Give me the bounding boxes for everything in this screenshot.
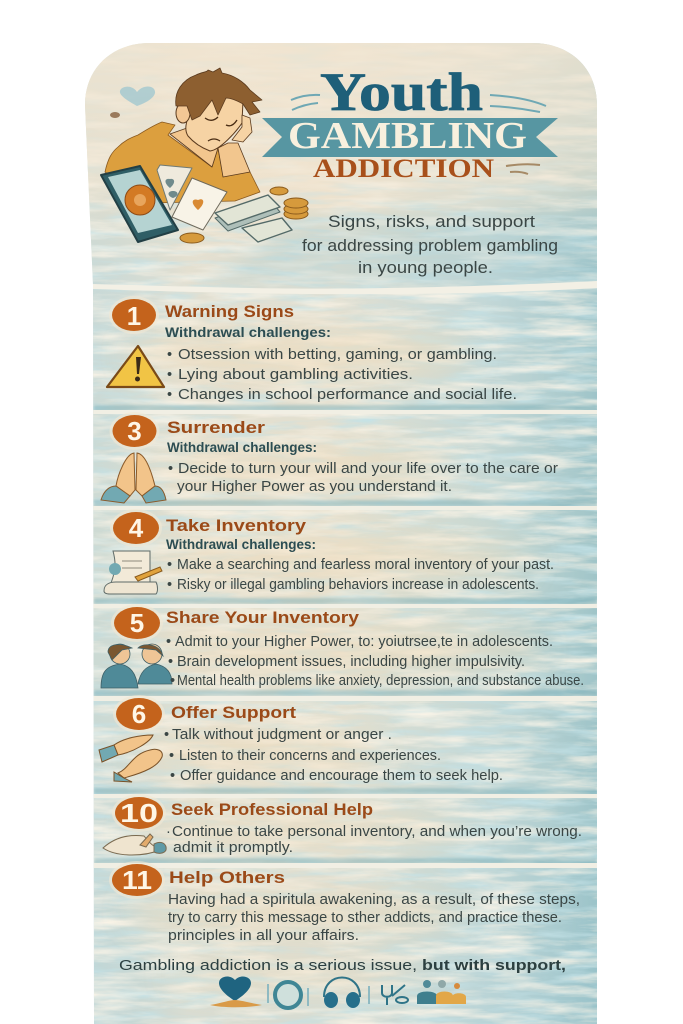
bullet list: • — [170, 768, 175, 784]
bullet list: Changes in school performance and social life. — [178, 387, 517, 403]
coin on table — [180, 233, 204, 243]
body text: principles in all your affairs. — [168, 928, 359, 944]
bullet list: Make a searching and fearless moral inventory of your past. — [177, 557, 554, 573]
body text: try to carry this message to sther addicts, and practice these. — [168, 910, 562, 926]
badge 4: 4 — [129, 513, 144, 543]
icon: helping hands — [99, 735, 162, 782]
badge 1 — [109, 296, 159, 334]
body text — [166, 824, 582, 856]
icon: scroll and pencil — [104, 551, 162, 594]
badge 3 — [110, 412, 160, 450]
bullet list: • — [167, 557, 172, 573]
panel: help others — [109, 861, 580, 944]
bullet list: Listen to their concerns and experiences. — [179, 748, 441, 764]
panel: share your inventory — [101, 604, 584, 689]
poker chip — [125, 185, 155, 215]
bullet text: your Higher Power as you understand it. — [177, 479, 452, 495]
eyes and mouth — [205, 117, 237, 141]
bullet list: Brain development issues, including higher impulsivity. — [177, 654, 525, 670]
illustration: stressed boy with phone, cards, money — [101, 68, 308, 243]
bullet list: • — [168, 654, 173, 670]
badge 11 — [109, 861, 165, 899]
bullet list: • — [167, 367, 172, 383]
bullet list: • — [167, 347, 172, 363]
hair — [176, 68, 262, 120]
face — [186, 90, 243, 151]
footer icons — [210, 976, 466, 1008]
panel: offer support — [99, 695, 503, 784]
bullet list — [166, 634, 584, 689]
heading: Seek Professional Help — [171, 800, 373, 819]
icon: headphones — [324, 978, 360, 1008]
body text: admit it promptly. — [173, 840, 293, 856]
icon: warning triangle — [107, 346, 164, 387]
subheading: Withdrawal challenges: — [167, 439, 317, 455]
panel: surrender — [101, 412, 558, 503]
card front — [172, 178, 227, 230]
subtitle: for addressing problem gambling — [302, 236, 558, 255]
heading: Take Inventory — [166, 516, 307, 535]
badge 5: 5 — [130, 608, 144, 638]
icon: two people talking — [101, 644, 172, 688]
panel: take inventory — [104, 509, 554, 594]
title word: Gambling: GAMBLING — [288, 115, 527, 157]
body text — [168, 892, 580, 944]
bullet list: • — [169, 748, 174, 764]
icon: praying hands — [101, 453, 166, 503]
bullet list — [167, 557, 554, 593]
heading: Offer Support — [171, 703, 296, 722]
bullet list — [164, 727, 503, 784]
badge 4 — [110, 509, 162, 547]
hoodie — [105, 122, 260, 203]
badge 10 — [112, 794, 166, 832]
arm — [218, 143, 250, 177]
title word: Youth: Youth — [320, 62, 483, 122]
swooshes — [291, 95, 546, 112]
icon: stethoscope — [369, 985, 408, 1005]
bullet list — [167, 347, 517, 403]
ribbon banner — [262, 118, 558, 157]
body text: Having had a spiritula awakening, as a result, of these steps, — [168, 892, 580, 908]
closing statement: Gambling addiction is a serious issue, but with support, — [119, 957, 566, 974]
title — [262, 62, 558, 183]
badge 10: 10 — [120, 798, 158, 828]
bullet text — [168, 461, 558, 495]
ear — [176, 103, 190, 123]
bullet list: • — [170, 673, 175, 689]
bullet list: • — [167, 387, 172, 403]
subtitle — [302, 212, 558, 277]
phone — [101, 166, 178, 242]
icon: group of people — [417, 980, 466, 1004]
subtitle: Signs, risks, and support — [328, 212, 535, 231]
bullet list: • — [164, 727, 169, 743]
bullet text: • — [168, 461, 173, 477]
card back — [157, 165, 192, 210]
card heart — [193, 199, 203, 210]
badge 3: 3 — [127, 416, 142, 446]
badge 11: 11 — [122, 865, 152, 895]
bullet text: Decide to turn your will and your life over to the care or — [178, 461, 558, 477]
infographic: youth gambling addiction — [85, 43, 597, 1024]
bullet list: • — [167, 577, 172, 593]
panel: warning signs — [107, 296, 517, 403]
bullet list: Mental health problems like anxiety, depression, and substance abuse. — [177, 673, 584, 689]
neck — [170, 128, 218, 167]
brown blotch — [110, 112, 120, 118]
icon: ring — [268, 982, 308, 1008]
heading: Surrender — [167, 418, 265, 437]
badge 5 — [111, 604, 163, 642]
bullet list: Talk without judgment or anger . — [172, 727, 392, 743]
grey card hearts — [166, 179, 178, 198]
bill — [215, 195, 280, 225]
badge 1: 1 — [127, 301, 141, 331]
bullet list: Admit to your Higher Power, to: yoiutrsee,te in adolescents. — [175, 634, 553, 650]
heading: Share Your Inventory — [166, 608, 360, 627]
badge 6: 6 — [132, 699, 146, 729]
icon: heart in hand — [210, 976, 262, 1007]
bullet list: • — [166, 634, 171, 650]
heading: Warning Signs — [165, 302, 294, 321]
swooshes near addiction — [506, 164, 540, 174]
icon: open hand and book — [103, 834, 166, 855]
coin stack — [284, 198, 308, 219]
coin — [270, 187, 288, 195]
bullet list: Otsession with betting, gaming, or gambling. — [178, 347, 497, 363]
bill lower — [242, 218, 292, 242]
hand — [232, 115, 252, 142]
bullet list: Offer guidance and encourage them to seek help. — [180, 768, 503, 784]
badge 6 — [113, 695, 165, 733]
subheading: Withdrawal challenges: — [165, 324, 331, 340]
subheading: Withdrawal challenges: — [166, 536, 316, 552]
bullet list: Risky or illegal gambling behaviors increase in adolescents. — [177, 577, 539, 593]
title word: Addiction: ADDICTION — [313, 154, 494, 183]
faint heart — [120, 86, 155, 106]
body text: · — [166, 824, 171, 840]
panel: watercolor background — [85, 43, 597, 1024]
bills stack — [215, 200, 280, 231]
heading: Help Others — [169, 868, 285, 887]
body text: Continue to take personal inventory, and when you’re wrong. — [172, 824, 582, 840]
panel: seek professional help — [103, 794, 582, 856]
subtitle: in young people. — [358, 258, 493, 277]
bullet list: Lying about gambling activities. — [178, 367, 413, 383]
